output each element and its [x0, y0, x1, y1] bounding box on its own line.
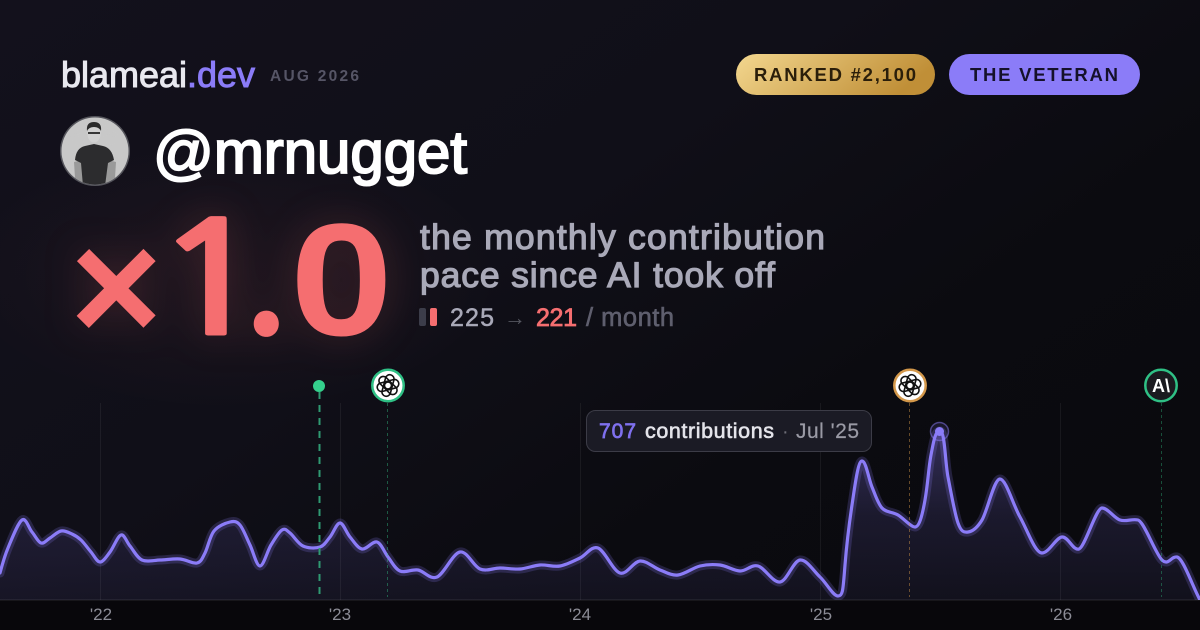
description line 2: pace since AI took off [420, 255, 775, 295]
axis label 2026: '26 [1050, 605, 1072, 624]
tooltip: 707 [599, 420, 636, 443]
marker: Anthropic: A\ [1152, 376, 1170, 396]
contribution area chart [0, 431, 1200, 612]
hero multiplier: . [244, 177, 289, 375]
axis label 2023: '23 [329, 605, 351, 624]
hero multiplier: × [70, 199, 162, 375]
hero multiplier: 1 [150, 203, 273, 358]
first contribution marker [313, 380, 325, 600]
brand logo: blameai.dev [61, 54, 255, 95]
hero multiplier [70, 177, 393, 375]
marker: OpenAI green [372, 370, 404, 597]
badge: archetype: THE VETERAN [970, 64, 1118, 85]
axis baseline [0, 599, 1200, 601]
axis label 2022: '22 [90, 605, 112, 624]
badge: rank: RANKED #2,100 [754, 64, 916, 85]
description line 1: the monthly contribution [420, 217, 825, 257]
date label: AUG 2026 [270, 68, 359, 85]
marker: Anthropic [1145, 370, 1177, 597]
tooltip [586, 410, 872, 452]
avatar photo [60, 116, 130, 186]
axis label 2024: '24 [569, 605, 591, 624]
pace comparison: → [504, 305, 526, 330]
badge: archetype [949, 54, 1140, 95]
pace comparison: 225 [450, 304, 494, 332]
hero multiplier: 0 [290, 190, 393, 369]
username: @mrnugget [153, 119, 467, 186]
marker: OpenAI orange [894, 370, 926, 597]
axis band [0, 600, 1200, 630]
badge: rank [736, 54, 935, 95]
peak marker [930, 422, 948, 440]
pace comparison [419, 304, 674, 332]
tooltip: contributions [645, 419, 774, 443]
pace comparison: / month [586, 304, 674, 332]
tooltip: · [782, 421, 789, 443]
axis label 2025: '25 [810, 605, 832, 624]
chart gridlines [100, 403, 1060, 600]
pace comparison: 221 [536, 304, 577, 332]
tooltip: Jul '25 [796, 420, 859, 443]
